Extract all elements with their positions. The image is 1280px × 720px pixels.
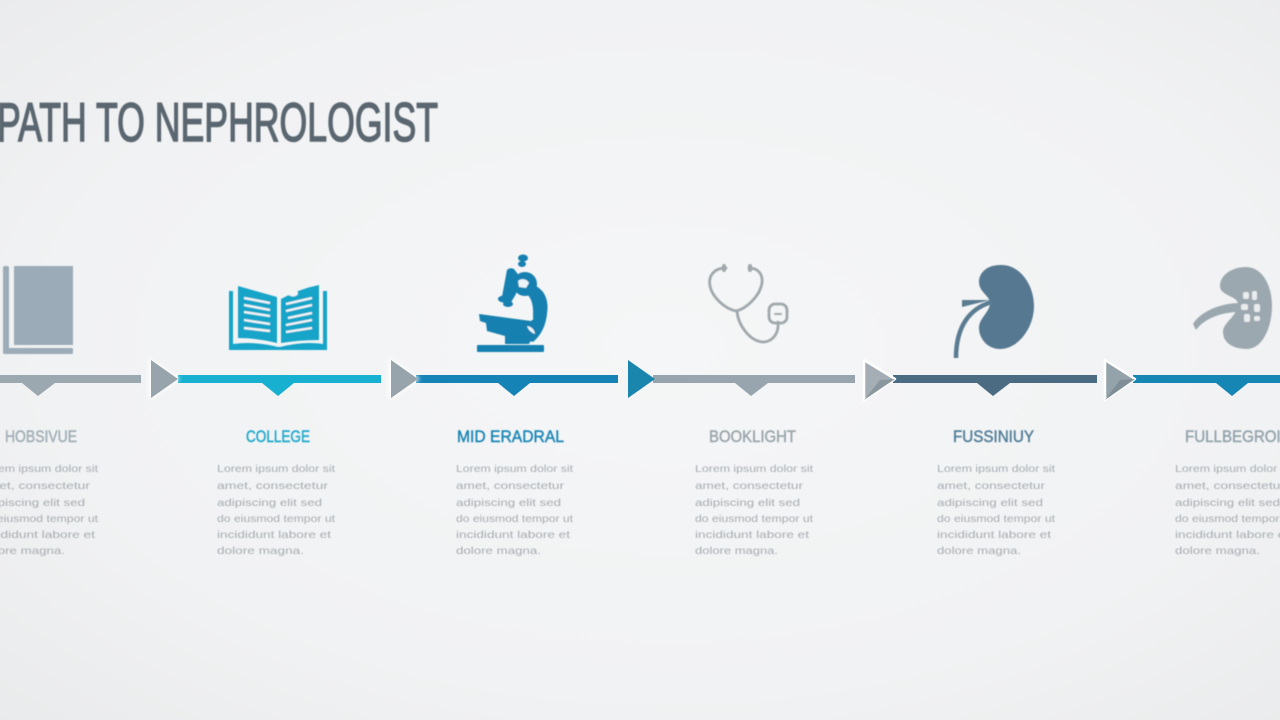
icon: microscope bbox=[477, 254, 548, 352]
icon: kidney with stones bbox=[1193, 267, 1272, 349]
step 4 text: dolore magna. bbox=[695, 545, 778, 557]
icon: stethoscope bbox=[710, 266, 787, 342]
arrow 5 bbox=[1105, 360, 1135, 400]
step 1 text bbox=[0, 463, 98, 557]
step 4 text: amet, consectetur bbox=[695, 480, 804, 492]
step 3 text: incididunt labore et bbox=[456, 529, 570, 541]
step 4 text: incididunt labore et bbox=[695, 529, 809, 541]
arrow 1 bbox=[149, 358, 180, 400]
step 5 text: incididunt labore et bbox=[937, 529, 1051, 541]
step 4 text: Lorem ipsum dolor sit bbox=[695, 463, 813, 475]
step 4 label: BOOKLIGHT bbox=[709, 427, 796, 446]
step 3 text: amet, consectetur bbox=[456, 480, 565, 492]
step 5 text: Lorem ipsum dolor sit bbox=[937, 463, 1055, 475]
step 2 text: Lorem ipsum dolor sit bbox=[217, 463, 335, 475]
step 2 text: do eiusmod tempor ut bbox=[217, 513, 335, 525]
step 6 text: dolore magna. bbox=[1175, 545, 1260, 557]
icon: kidney with ureter bbox=[956, 265, 1034, 358]
step 5 text: do eiusmod tempor ut bbox=[937, 513, 1055, 525]
step 1 label: HOBSIVUE bbox=[5, 427, 77, 446]
timeline bbox=[0, 358, 1280, 400]
segment 1 bbox=[0, 375, 141, 396]
step 3 text: Lorem ipsum dolor sit bbox=[456, 463, 573, 475]
step 3 label: MID ERADRAL bbox=[457, 427, 564, 446]
step 6 text: incididunt labore et bbox=[1175, 529, 1280, 541]
segment 6 bbox=[1133, 375, 1280, 396]
arrow 2 bbox=[389, 358, 420, 400]
step 5 text bbox=[937, 463, 1055, 557]
icon: open book bbox=[229, 285, 327, 350]
step 2 label: COLLEGE bbox=[246, 427, 310, 446]
step 3 text: do eiusmod tempor ut bbox=[456, 513, 573, 525]
segment 4 bbox=[653, 375, 855, 396]
step 4 text bbox=[695, 463, 813, 557]
step 5 text: amet, consectetur bbox=[937, 480, 1046, 492]
step 5 label: FUSSINIUY bbox=[953, 427, 1034, 446]
step 2 text: incididunt labore et bbox=[217, 529, 331, 541]
segment 5 bbox=[893, 375, 1097, 396]
step 4 text: adipiscing elit sed bbox=[695, 497, 800, 509]
step 5 text: dolore magna. bbox=[937, 545, 1021, 557]
step 3 text: adipiscing elit sed bbox=[456, 497, 561, 509]
title: PATH TO NEPHROLOGIST bbox=[0, 91, 438, 153]
step 5 text: adipiscing elit sed bbox=[937, 497, 1043, 509]
arrow 3 bbox=[628, 360, 655, 398]
step 3 text bbox=[456, 463, 573, 557]
step 6 text: Lorem ipsum dolor sit bbox=[1175, 463, 1280, 475]
icon: closed book bbox=[3, 266, 73, 354]
step 6 text: amet, consectetur bbox=[1175, 480, 1280, 492]
step 6 text bbox=[1175, 463, 1280, 557]
step 6 text: do eiusmod tempor ut bbox=[1175, 513, 1280, 525]
segment 3 bbox=[416, 375, 618, 396]
step 6 text: adipiscing elit sed bbox=[1175, 497, 1280, 509]
step 2 text: adipiscing elit sed bbox=[217, 497, 322, 509]
arrow 4 bbox=[864, 360, 895, 400]
step 3 text: dolore magna. bbox=[456, 545, 541, 557]
step 2 text: amet, consectetur bbox=[217, 480, 329, 492]
step 2 text bbox=[217, 463, 335, 557]
step 2 text: dolore magna. bbox=[217, 545, 304, 557]
segment 2 bbox=[178, 375, 381, 396]
step 4 text: do eiusmod tempor ut bbox=[695, 513, 813, 525]
